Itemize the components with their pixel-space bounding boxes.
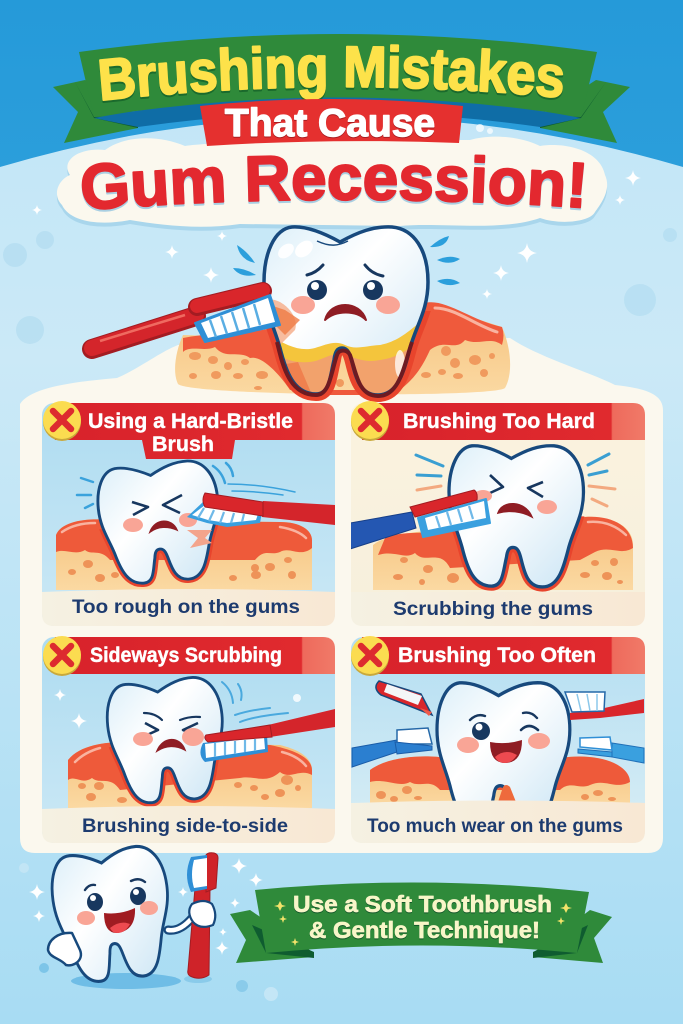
tooth decay and exposed roots: [272, 300, 416, 394]
caption strip: [351, 592, 645, 626]
card background: [351, 403, 645, 626]
sweat marks: [233, 236, 460, 285]
marks: [77, 463, 295, 508]
brush: right light blue: [578, 737, 644, 763]
message: Use a Soft Toothbrush: [293, 891, 552, 917]
ribbon tails: [53, 80, 138, 143]
panel backing cloud: [20, 338, 663, 853]
marks: [416, 454, 615, 506]
header band: [55, 637, 335, 674]
caption: Brushing side-to-side: [82, 816, 288, 837]
card background: [42, 637, 335, 843]
tooth body: [264, 227, 428, 395]
icon: red X badge: [351, 636, 389, 676]
heading: Using a Hard-Bristle: [88, 410, 293, 433]
mascot tooth with toothbrush: [19, 843, 278, 1001]
face: [133, 713, 204, 751]
happy winking face: [457, 713, 550, 763]
panel: Brushing Too Often: [351, 636, 645, 843]
card illustration: [352, 680, 644, 803]
header band: [362, 637, 645, 674]
shadow: [71, 973, 181, 989]
ribbon tails: [230, 910, 314, 963]
sparkles: [54, 689, 301, 729]
face: [123, 495, 212, 548]
tooth root halo: [266, 311, 430, 402]
highlights: [275, 237, 316, 261]
panel: Using a Hard-Bristle Brush: [42, 401, 335, 626]
happy face: [77, 879, 158, 933]
heading: Brush: [152, 433, 214, 456]
brush: [350, 490, 490, 549]
heading: Brushing Too Hard: [403, 410, 595, 433]
title banner: [53, 34, 630, 231]
title line 2: That Cause: [225, 102, 435, 145]
arc shadow: [94, 95, 581, 127]
title line 3: [82, 154, 584, 212]
brush: top right red: [565, 692, 644, 720]
left arm: [48, 933, 81, 965]
brush: [187, 493, 335, 527]
gum: [373, 517, 633, 590]
card illustration: [54, 675, 335, 808]
title line 3: Gum Recession!: [82, 154, 584, 212]
tooth: [94, 458, 226, 588]
header band: [55, 403, 335, 459]
caption strip: [351, 800, 645, 843]
card illustration: [350, 446, 633, 590]
gum: [68, 742, 312, 808]
tooth outline: [264, 227, 428, 395]
bottom banner: [230, 882, 612, 963]
card illustration: [56, 458, 335, 590]
gum: [56, 519, 312, 590]
main illustration: sad tooth with brush: [92, 227, 510, 400]
gum: sand layer: [175, 303, 510, 394]
tooth: [435, 681, 572, 801]
caption: Too rough on the gums: [72, 597, 300, 618]
sparkles: [19, 858, 278, 1001]
brush: left blue: [352, 728, 432, 767]
right arm: [168, 918, 192, 930]
caption: Too much wear on the gums: [367, 816, 623, 837]
sad face: [291, 265, 400, 320]
green banner: [79, 34, 597, 117]
red banner: [200, 99, 463, 146]
tooth body: [47, 843, 179, 987]
heading: Sideways Scrubbing: [90, 644, 282, 667]
root outline: [277, 342, 412, 396]
hand: [189, 901, 215, 927]
message: & Gentle Technique!: [309, 917, 540, 943]
brush: top left: [376, 681, 432, 716]
marks: [222, 682, 288, 722]
card background: [42, 403, 335, 626]
panel: Brushing Too Hard: [350, 401, 645, 626]
red toothbrush: [92, 290, 280, 349]
card background: [351, 637, 645, 843]
brush: [200, 709, 335, 762]
caption strip: [42, 806, 335, 843]
panel: Sideways Scrubbing: [42, 636, 335, 843]
gum: porous spots: [189, 346, 495, 390]
icon: red X badge: [351, 401, 389, 441]
toothbrush: [187, 853, 218, 978]
heading: Brushing Too Often: [398, 644, 596, 667]
top blue arc: [0, 0, 683, 167]
gum: red top: [183, 302, 504, 395]
header band: [362, 403, 645, 440]
green banner: [255, 882, 589, 953]
cream cloud: [57, 141, 607, 231]
tooth: [449, 446, 583, 587]
face: [474, 475, 557, 517]
gold sparkles: [274, 901, 572, 946]
title line 1: Brushing Mistakes: [99, 44, 564, 103]
icon: red X badge: [43, 401, 81, 441]
tooth: [104, 675, 230, 807]
background sparkles and bubbles: [3, 124, 677, 344]
caption: Scrubbing the gums: [393, 599, 593, 620]
caption strip: [42, 589, 335, 626]
icon: red X badge: [43, 636, 81, 676]
gum: [370, 756, 630, 808]
